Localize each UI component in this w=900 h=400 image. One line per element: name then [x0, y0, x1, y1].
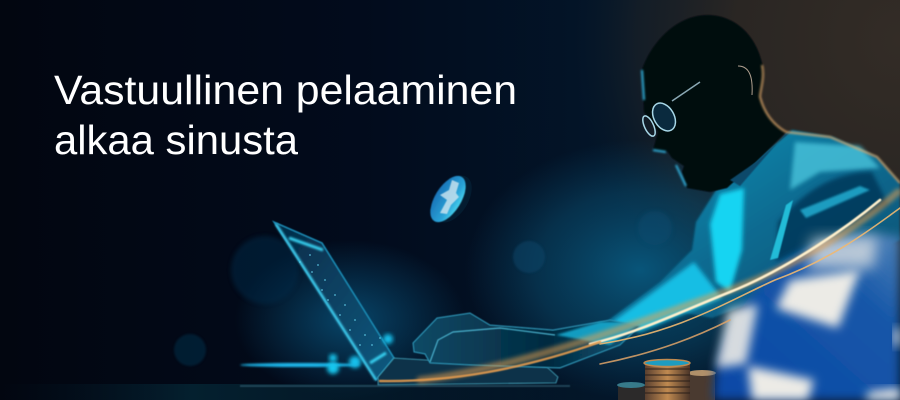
laptop screen	[274, 222, 394, 380]
person silhouette	[413, 15, 900, 368]
light glows on table	[240, 363, 360, 367]
coin stacks	[617, 360, 716, 400]
head and neck	[642, 15, 786, 192]
shirt bright folds	[710, 188, 744, 292]
screen dots	[299, 254, 381, 346]
laptop	[240, 222, 570, 387]
chip white marks	[716, 236, 900, 400]
title line one: Vastuullinen pelaaminen	[54, 67, 517, 113]
title line two: alkaa sinusta	[54, 117, 298, 163]
hands on keyboard	[413, 313, 640, 368]
back of head warm rim light	[760, 65, 900, 183]
face rim light	[642, 70, 686, 186]
shirt and torso	[606, 130, 900, 322]
golden light streaks	[380, 192, 900, 381]
ear highlight	[738, 66, 752, 95]
icon: glasses	[640, 82, 700, 138]
table reflection line	[240, 385, 570, 387]
screen highlights	[289, 238, 323, 250]
big blurred poker chip	[714, 234, 900, 400]
collar	[730, 130, 792, 186]
icon: small floating poker chip	[423, 169, 479, 229]
laptop base	[378, 358, 558, 385]
